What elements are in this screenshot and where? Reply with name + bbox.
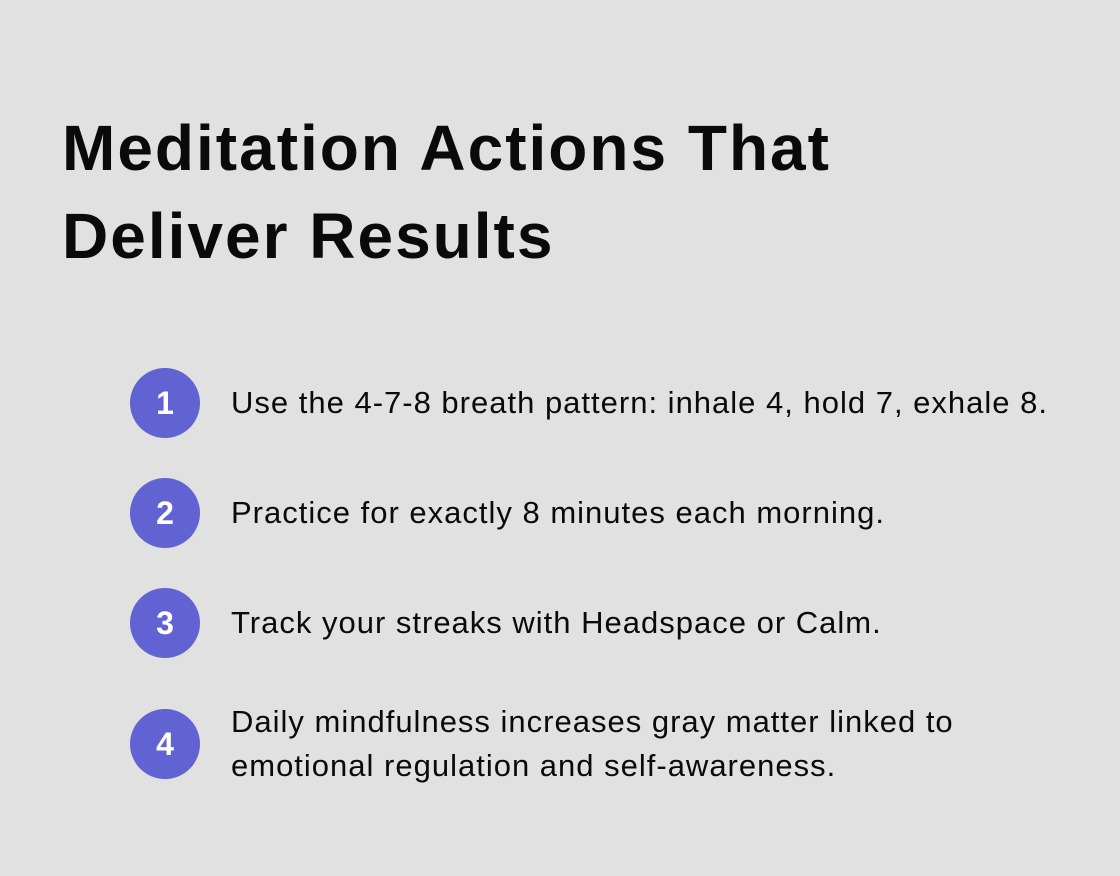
badge 4 [130, 709, 200, 779]
title [62, 112, 831, 272]
badge 4: 4 [156, 726, 174, 762]
item 2 [130, 478, 885, 548]
text 4: Daily mindfulness increases gray matter linked to [231, 704, 954, 739]
item 4 [130, 704, 954, 783]
text 3: Track your streaks with Headspace or Calm. [231, 605, 882, 640]
title: Meditation Actions That [62, 112, 831, 184]
badge 2 [130, 478, 200, 548]
badge 3 [130, 588, 200, 658]
item 3 [130, 588, 882, 658]
badge 1 [130, 368, 200, 438]
badge 3: 3 [156, 605, 174, 641]
text 1: Use the 4-7-8 breath pattern: inhale 4, hold 7, exhale 8. [231, 385, 1048, 420]
title: Deliver Results [62, 200, 554, 272]
text 2: Practice for exactly 8 minutes each morning. [231, 495, 885, 530]
text 4: emotional regulation and self-awareness. [231, 748, 836, 783]
item 1 [130, 368, 1048, 438]
text 4 [231, 704, 954, 783]
badge 1: 1 [156, 385, 174, 421]
badge 2: 2 [156, 495, 174, 531]
